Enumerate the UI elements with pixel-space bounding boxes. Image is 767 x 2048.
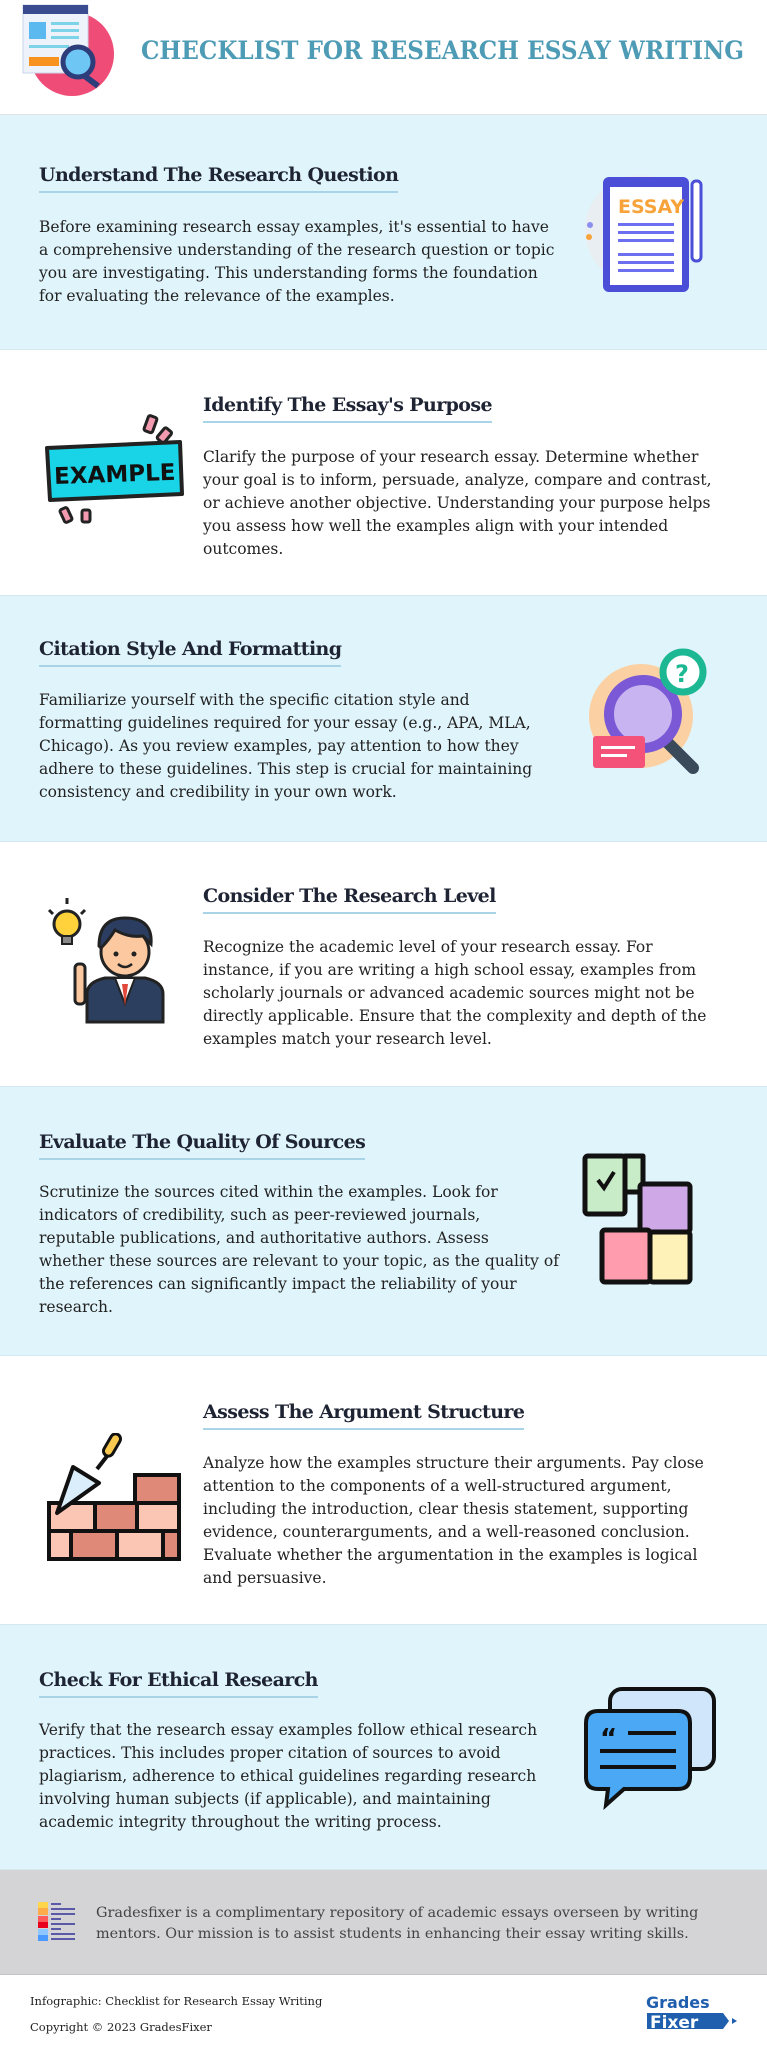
text block [203,938,706,1048]
text block: research. [39,1298,113,1316]
text block: adhere to these guidelines. This step is crucial for maintaining [39,760,532,778]
footer text [30,1994,322,2034]
text block: you assess how well the examples align with your intended [203,517,668,535]
text block [202,1454,704,1587]
header [0,0,767,115]
text block: whether these sources are relevant to your topic, as the quality of [39,1252,559,1270]
text block: a comprehensive understanding of the research question or topic [39,241,554,259]
text block: Analyze how the examples structure their arguments. Pay close [203,1454,704,1472]
footer [0,1975,767,2048]
icon: puzzle pieces [582,1154,692,1284]
text block: involving human subjects (if applicable), and maintaining [39,1790,491,1808]
footer text: Copyright © 2023 GradesFixer [30,2020,212,2034]
text block: or achieve another objective. Understanding your purpose helps [203,494,710,512]
text block [38,218,554,305]
text block: reputable publications, and authoritative authors. Assess [39,1229,489,1247]
icon: brick wall with trowel [47,1433,181,1561]
text block: scholarly journals or advanced academic sources might not be [203,984,695,1002]
text block: your goal is to inform, persuade, analyze, compare and contrast, [203,471,712,489]
heading: Check For Ethical Research [39,1669,318,1691]
icon: list [38,1902,75,1941]
text block: attention to the components of a well-structured argument, [203,1477,672,1495]
text block: and persuasive. [203,1569,327,1587]
text block: directly applicable. Ensure that the complexity and depth of the [203,1007,706,1025]
icon: example sign: EXAMPLE [54,460,176,490]
text block: evidence, counterarguments, and a well-reasoned conclusion. [203,1523,690,1541]
text block [38,1721,537,1831]
text block: Clarify the purpose of your research essay. Determine whether [203,448,698,466]
panel: assess the argument structure [0,1356,767,1625]
text block: mission: Gradesfixer is a complimentary repository of academic essays overseen by writing [96,1905,698,1921]
heading: Assess The Argument Structure [203,1401,524,1423]
text block: Familiarize yourself with the specific citation style and [39,691,470,709]
text block [39,1183,560,1316]
icon: example sign [45,414,184,524]
text block: mission: mentors. Our mission is to assist students in enhancing their essay writing skills. [96,1926,689,1942]
heading: Consider The Research Level [203,885,496,907]
logo: gradesfixer: Fixer [650,2013,699,2033]
text block: indicators of credibility, such as peer-reviewed journals, [39,1206,480,1224]
panel: about gradesfixer [0,1870,767,1975]
text block: formatting guidelines required for your essay (e.g., APA, MLA, [39,714,531,732]
icon: essay tablet [585,175,702,292]
text block [202,448,712,558]
text block: including the introduction, clear thesis statement, supporting [203,1500,688,1518]
heading: Citation Style And Formatting [39,638,341,660]
text block: outcomes. [203,540,283,558]
panel: citation style and formatting [0,596,767,842]
text block: practices. This includes proper citation of sources to avoid [39,1744,501,1762]
heading: Identify The Essay's Purpose [203,394,492,416]
text block: you are investigating. This understanding forms the foundation [39,264,538,282]
icon: speech bubbles: “ [600,1724,617,1754]
heading: Understand The Research Question [39,164,398,186]
text block: consistency and credibility in your own work. [39,783,397,801]
heading: Evaluate The Quality Of Sources [39,1131,365,1153]
text block: mission [96,1905,698,1942]
logo: gradesfixer: Grades [646,1993,710,2012]
panel: evaluate the quality of sources [0,1087,767,1356]
text block: Before examining research essay examples, it's essential to have [39,218,549,236]
text block: Verify that the research essay examples follow ethical research [39,1721,537,1739]
icon: magnifier with question: ? [675,660,689,688]
icon: speech bubbles [584,1687,716,1810]
icon: student with lightbulb [48,898,164,1024]
icon: magnifier with question [589,648,706,774]
text block: plagiarism, adherence to ethical guidelines regarding research [39,1767,536,1785]
text block: Chicago). As you review examples, pay attention to how they [39,737,519,755]
panel: understand the research question [0,115,767,350]
footer text: Infographic: Checklist for Research Essay Writing [30,1994,322,2008]
logo: gradesfixer [646,1993,737,2033]
icon: header document with magnifier [22,4,114,96]
text block: for evaluating the relevance of the examples. [39,287,395,305]
text block [39,691,532,801]
text block: Recognize the academic level of your research essay. For [203,938,653,956]
text block: Scrutinize the sources cited within the examples. Look for [39,1183,498,1201]
text block: Evaluate whether the argumentation in the examples is logical [203,1546,697,1564]
text block: instance, if you are writing a high school essay, examples from [203,961,696,979]
text block: the references can significantly impact the reliability of your [39,1275,517,1293]
panel: consider the research level [0,842,767,1087]
text block: academic integrity throughout the writing process. [39,1813,442,1831]
icon: essay tablet: ESSAY [618,196,684,218]
panel: check for ethical research [0,1625,767,1870]
panel: identify the essay's purpose [0,350,767,596]
text block: examples match your research level. [203,1030,492,1048]
